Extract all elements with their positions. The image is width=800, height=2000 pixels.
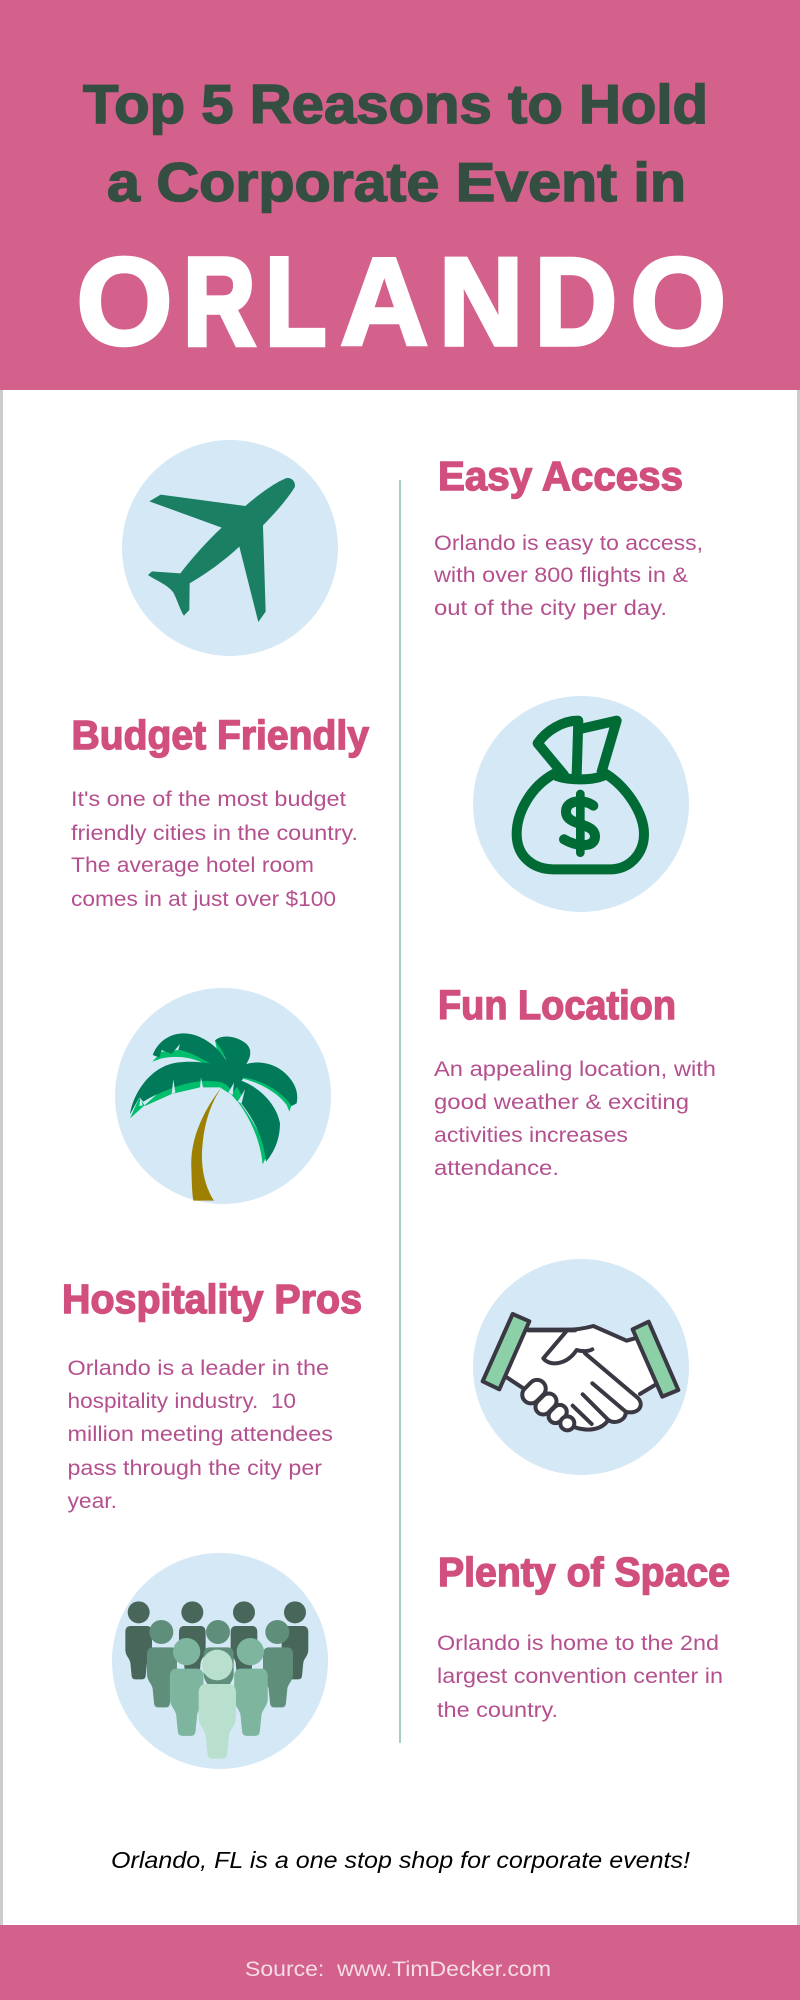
text: easy access: Orlando is easy to access, xyxy=(434,531,703,555)
panel: plenty of space xyxy=(437,1549,730,1722)
text: fun location: good weather & exciting xyxy=(434,1090,689,1114)
title: Orlando xyxy=(76,232,726,372)
text: fun location: An appealing location, with xyxy=(434,1057,716,1081)
heading: budget friendly: Budget Friendly xyxy=(72,712,369,758)
panel: budget friendly xyxy=(71,712,369,911)
text: budget friendly: friendly cities in the country. xyxy=(71,821,358,845)
heading: hospitality pros: Hospitality Pros xyxy=(62,1276,362,1322)
panel: hospitality pros xyxy=(62,1276,362,1513)
text: hospitality pros xyxy=(68,1356,333,1513)
text: budget friendly xyxy=(71,787,358,911)
title: Orlando: D xyxy=(535,233,617,372)
panel: fun location xyxy=(434,982,716,1180)
text: easy access: out of the city per day. xyxy=(434,596,667,620)
title: Orlando: L xyxy=(266,232,326,371)
title: Orlando: N xyxy=(439,233,523,371)
icon: palm tree xyxy=(115,988,331,1204)
text: fun location: activities increases xyxy=(434,1123,628,1147)
panel: footer xyxy=(0,1925,800,2000)
text: budget friendly: comes in at just over $100 xyxy=(71,887,336,911)
text: budget friendly: It's one of the most budget xyxy=(71,787,346,811)
panel: header xyxy=(0,0,800,390)
text: easy access: with over 800 flights in & xyxy=(433,563,688,587)
text: fun location: attendance. xyxy=(434,1156,559,1180)
text: hospitality pros: million meeting attendees xyxy=(68,1422,333,1446)
title: Orlando: R xyxy=(184,232,255,371)
text: plenty of space: Orlando is home to the 2nd xyxy=(437,1631,719,1655)
icon: money bag xyxy=(473,696,689,912)
icon: group of people xyxy=(112,1553,328,1769)
title line 2: a Corporate Event in xyxy=(107,151,686,213)
icon: handshake xyxy=(473,1259,689,1475)
text: easy access xyxy=(433,531,703,620)
text: hospitality pros: year. xyxy=(68,1489,117,1513)
panel: easy access xyxy=(433,453,703,620)
title: Orlando: O xyxy=(76,234,173,372)
text: hospitality pros: pass through the city per xyxy=(68,1456,322,1480)
title: Orlando: O xyxy=(630,234,726,372)
text: budget friendly: The average hotel room xyxy=(71,853,314,877)
heading: plenty of space: Plenty of Space xyxy=(438,1549,730,1595)
text: fun location xyxy=(434,1057,716,1180)
text: plenty of space xyxy=(437,1631,723,1722)
title line 1: Top 5 Reasons to Hold xyxy=(83,73,708,135)
heading: easy access: Easy Access xyxy=(438,453,683,499)
tagline: Orlando, FL is a one stop shop for corporate events! xyxy=(111,1847,691,1873)
icon: airplane xyxy=(122,440,338,656)
text: hospitality pros: hospitality industry. 10 xyxy=(68,1389,296,1413)
text: hospitality pros: Orlando is a leader in the xyxy=(68,1356,329,1380)
heading: fun location: Fun Location xyxy=(438,982,676,1028)
text: plenty of space: the country. xyxy=(437,1698,558,1722)
text: plenty of space: largest convention center in xyxy=(437,1664,723,1688)
source: Source: www.TimDecker.com xyxy=(245,1957,551,1981)
title: Orlando: A xyxy=(340,233,429,372)
